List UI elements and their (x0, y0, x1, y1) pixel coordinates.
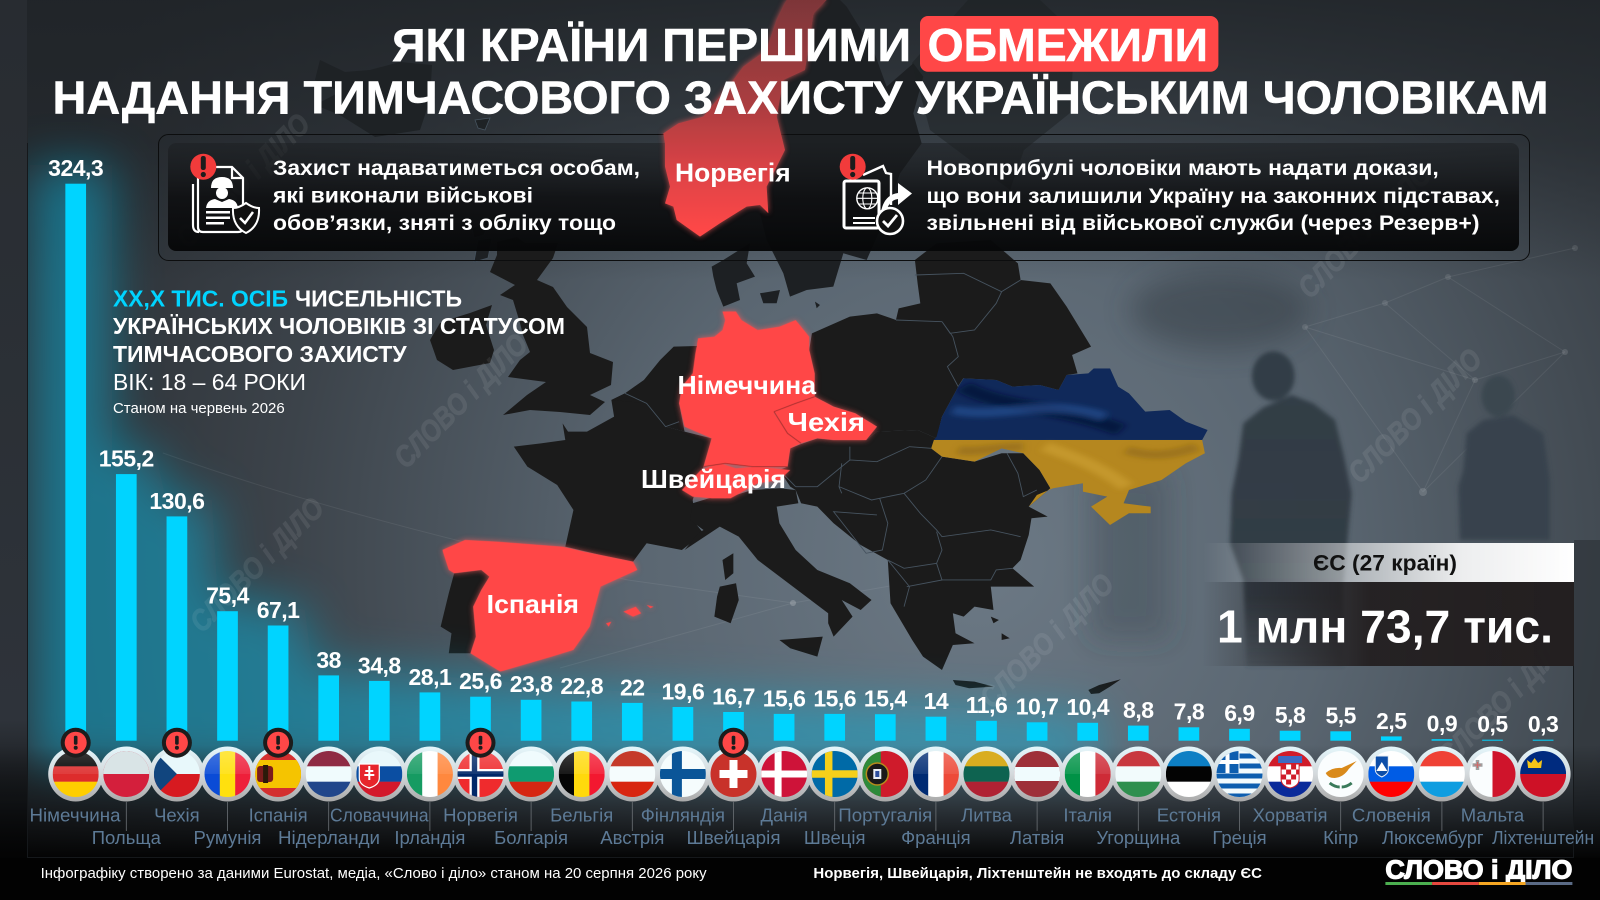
footer strip (0, 858, 1600, 900)
flag: Швеція (807, 746, 862, 802)
label: Norway: Норвегія (675, 158, 791, 188)
bar: Бельгія: 22,8 (560, 673, 604, 699)
watermarks: СЛОВО і ДІЛО (974, 568, 1121, 715)
map of Europe (315, 0, 1121, 694)
bar: Австрія (620, 674, 645, 741)
country labels: Норвегія (443, 805, 518, 826)
bar: Болгарія (510, 671, 553, 741)
watermarks: СЛОВО і ДІЛО (1292, 158, 1439, 305)
flag: Румунія (200, 746, 255, 802)
bar: Іспанія (257, 597, 300, 741)
bar: Польща: 155,2 (99, 446, 154, 472)
text: protection conditions: обов’язки, зняті з обліку тощо (273, 211, 616, 235)
country labels: Ірландія (394, 827, 465, 848)
badge: Норвегія (466, 728, 496, 758)
map: UK and Ireland (430, 220, 613, 415)
bar: Португалія (864, 686, 907, 741)
bar: Португалія: 15,4 (864, 686, 907, 712)
country labels: Мальта (1461, 805, 1525, 826)
bar: Греція (1224, 700, 1255, 741)
country labels: Фінляндія (641, 805, 725, 826)
text: protection conditions: Захист надаватиметься особам, (273, 156, 640, 180)
EU header (1203, 543, 1574, 582)
flag: Чехія (149, 746, 204, 802)
country labels: Болгарія (494, 827, 568, 848)
title line 2: НАДАННЯ ТИМЧАСОВОГО ЗАХИСТУ УКРАЇНСЬКИМ ЧОЛОВІКАМ (52, 71, 1548, 123)
country labels: Італія (1063, 805, 1112, 826)
network lines backdrop (163, 245, 1578, 668)
bar: Швеція: 15,6 (813, 685, 856, 711)
map: Norway (663, 0, 827, 237)
country labels: Швейцарія (686, 827, 780, 848)
flag: Швейцарія (708, 750, 759, 802)
flag: Ліхтенштейн (1516, 746, 1571, 802)
map: Ukraine in flag colours (931, 368, 1208, 525)
bar: Болгарія: 23,8 (510, 671, 553, 697)
country labels: Словенія (1352, 805, 1431, 826)
text: proof requirements: що вони залишили Україну на законних підставах, (926, 184, 1500, 208)
flag: Ірландія (402, 746, 457, 802)
flag: Словаччина (352, 746, 407, 802)
country labels: Угорщина (1096, 827, 1181, 848)
label: Spain: Іспанія (487, 589, 579, 619)
bar: Швейцарія (712, 683, 755, 741)
bar: Італія: 10,4 (1066, 694, 1110, 720)
bar: Нідерланди: 38 (316, 647, 342, 673)
map: Iceland and Nordic background (315, 0, 1075, 308)
title line 1: ЯКІ КРАЇНИ ПЕРШИМИ (392, 19, 911, 71)
bar: Ліхтенштейн: 0,3 (1528, 711, 1558, 737)
watermarks (170, 108, 1579, 773)
flag: Франція (908, 746, 963, 802)
flag: Люксембург (1414, 746, 1469, 802)
text: protection conditions (272, 156, 640, 235)
silhouettes of men (1090, 351, 1550, 667)
label: Czechia: Чехія (788, 407, 865, 437)
flag: Латвія (1010, 746, 1065, 802)
watermarks: СЛОВО і ДІЛО (1432, 626, 1579, 773)
country labels: Іспанія (249, 805, 308, 826)
watermarks: СЛОВО і ДІЛО (1342, 343, 1489, 490)
EU total callout (1203, 543, 1574, 666)
country labels: Словаччина (330, 805, 429, 826)
country labels: Ліхтенштейн (1492, 827, 1594, 848)
flag: Норвегія (455, 750, 506, 802)
badge: Чехія (162, 728, 192, 758)
country labels: Естонія (1157, 805, 1221, 826)
bar: Італія (1066, 694, 1110, 741)
bar chart (48, 155, 1558, 741)
flag: Кіпр (1313, 746, 1368, 802)
title highlighted word: ОБМЕЖИЛИ (928, 19, 1208, 71)
badge: Швейцарія (718, 728, 748, 758)
flag: Угорщина (1111, 746, 1166, 802)
bar: Фінляндія: 19,6 (662, 678, 704, 704)
bar: Греція: 6,9 (1224, 700, 1255, 726)
bar: Угорщина: 8,8 (1123, 697, 1154, 723)
chart legend (113, 286, 565, 417)
bar: Мальта: 0,5 (1477, 711, 1508, 737)
bar: Швейцарія: 16,7 (712, 683, 755, 709)
flag row (48, 746, 1571, 802)
country labels: Австрія (600, 827, 664, 848)
bar: Литва: 11,6 (966, 692, 1007, 718)
chart legend: Станом на червень 2026 (113, 401, 285, 417)
map: mainland dark countries (441, 240, 1121, 694)
bar: Словаччина (358, 652, 401, 741)
bar: Кіпр (1325, 703, 1357, 741)
flag: Словенія (1364, 746, 1419, 802)
bar: Норвегія: 25,6 (459, 668, 502, 694)
title highlight pill (920, 16, 1218, 72)
watermarks: СЛОВО і ДІЛО (170, 108, 317, 255)
chart legend: УКРАЇНСЬКИХ ЧОЛОВІКІВ ЗІ СТАТУСОМ (113, 313, 565, 339)
bar: Чехія (149, 488, 204, 741)
text: proof requirements (926, 156, 1500, 235)
bar: Ірландія: 28,1 (409, 664, 452, 690)
bar: Данія: 15,6 (763, 685, 805, 711)
badge: Іспанія (263, 728, 293, 758)
country labels: Португалія (838, 805, 932, 826)
country labels: Литва (961, 805, 1013, 826)
logo: СЛОВО і ДІЛО (1385, 854, 1572, 884)
bar: Норвегія (459, 668, 502, 741)
bar: Нідерланди (316, 647, 342, 741)
bars glow (30, 165, 1100, 770)
flag: Болгарія (504, 746, 559, 802)
chart legend: ЧИСЕЛЬНІСТЬ (295, 286, 462, 312)
country labels: Чехія (154, 805, 200, 826)
country labels: Нідерланди (278, 827, 380, 848)
EU value: 1 млн 73,7 тис. (1217, 601, 1553, 653)
country labels: Швеція (804, 827, 865, 848)
bar: Литва (966, 692, 1007, 741)
bar: Польща (99, 446, 154, 741)
country labels: Данія (761, 805, 808, 826)
country labels: Польща (92, 827, 162, 848)
bar: Угорщина (1123, 697, 1154, 741)
country labels: Люксембург (1382, 827, 1484, 848)
country labels (30, 805, 1594, 848)
bar: Данія (763, 685, 805, 741)
bar: Румунія (206, 583, 250, 741)
flag: Австрія (605, 746, 660, 802)
bar: Румунія: 75,4 (206, 583, 250, 609)
country labels: Румунія (194, 827, 261, 848)
flag: Італія (1060, 746, 1115, 802)
bar: Швеція (813, 685, 856, 741)
flag: Польща (99, 746, 154, 802)
country labels: Кіпр (1323, 827, 1358, 848)
flag: Фінляндія (655, 746, 710, 802)
country labels: Бельгія (550, 805, 613, 826)
text: protection conditions: які виконали військові (272, 184, 533, 208)
bar: Німеччина (48, 155, 103, 741)
title (52, 16, 1548, 123)
bar: Хорватія: 5,8 (1275, 702, 1306, 728)
bar: Франція (924, 688, 949, 741)
flag: Бельгія (554, 746, 609, 802)
bar: Естонія: 7,8 (1174, 699, 1205, 725)
label: Switzerland: Швейцарія (641, 464, 786, 494)
icon: soldier document with shield (190, 154, 259, 233)
bar: Хорватія (1275, 702, 1306, 741)
map country labels (487, 158, 865, 619)
label: Germany: Німеччина (678, 370, 817, 400)
text: proof requirements: Новоприбулі чоловіки мають надати докази, (926, 156, 1439, 180)
chart legend: ХХ,Х ТИС. ОСІБ (113, 286, 288, 312)
watermarks: СЛОВО і ДІЛО (184, 492, 331, 639)
watermarks: СЛОВО і ДІЛО (388, 328, 535, 475)
bar: Австрія: 22 (620, 674, 645, 700)
EU header label: ЄС (27 країн) (1313, 551, 1457, 576)
flag: Німеччина (48, 746, 103, 802)
bar: Іспанія: 67,1 (257, 597, 300, 623)
country labels: Франція (901, 827, 971, 848)
flag: Мальта (1465, 746, 1520, 802)
bar: Франція: 14 (924, 688, 949, 714)
bar: Естонія (1174, 699, 1205, 741)
bar: Латвія (1016, 694, 1058, 741)
map: Germany, Czechia, Switzerland, Spain (442, 312, 877, 672)
bar: Словенія: 2,5 (1376, 708, 1407, 734)
flag: Естонія (1161, 746, 1216, 802)
footer EU note: Норвегія, Швейцарія, Ліхтенштейн не входять до складу ЄС (813, 866, 1263, 882)
country labels: Греція (1212, 827, 1267, 848)
flag: Іспанія (252, 750, 304, 802)
badge: Німеччина (61, 728, 91, 758)
flag: Хорватія (1263, 746, 1318, 802)
chart legend: ВІК: 18 – 64 РОКИ (113, 369, 306, 395)
bar: Словаччина: 34,8 (358, 652, 401, 678)
flag: Данія (757, 746, 812, 802)
bar: Ірландія (409, 664, 452, 741)
chart legend: ТИМЧАСОВОГО ЗАХИСТУ (113, 341, 407, 367)
bar: Чехія: 130,6 (149, 488, 204, 514)
EU value panel (1203, 582, 1574, 666)
bar: Бельгія (560, 673, 604, 741)
alert badges on restricting countries (61, 728, 748, 758)
info panel (158, 134, 1530, 260)
map: restricted countries in red (442, 0, 877, 672)
bar: Фінляндія (662, 678, 704, 741)
country labels: Латвія (1010, 827, 1064, 848)
bar: Латвія: 10,7 (1016, 694, 1058, 720)
tick lines for lower labels (126, 802, 1543, 831)
text: proof requirements: звільнені від військової служби (через Резерв+) (926, 211, 1480, 235)
icon: passport with arrow and check (840, 154, 912, 234)
country labels: Німеччина (30, 805, 121, 826)
footer source note: Інфографіку створено за даними Eurostat, медіа, «Слово і діло» станом на 20 серпня 2026 року (41, 866, 707, 882)
flag: Литва (959, 746, 1014, 802)
bar: Німеччина: 324,3 (48, 155, 103, 181)
flag: Нідерланди (301, 746, 356, 802)
bar: Люксембург: 0,9 (1427, 711, 1457, 737)
flag: Греція (1212, 746, 1267, 802)
flag: Португалія (858, 746, 913, 802)
bottom fade (0, 745, 1600, 860)
country labels: Хорватія (1253, 805, 1328, 826)
chart frame (27, 143, 1574, 858)
bar: Кіпр: 5,5 (1325, 703, 1357, 729)
